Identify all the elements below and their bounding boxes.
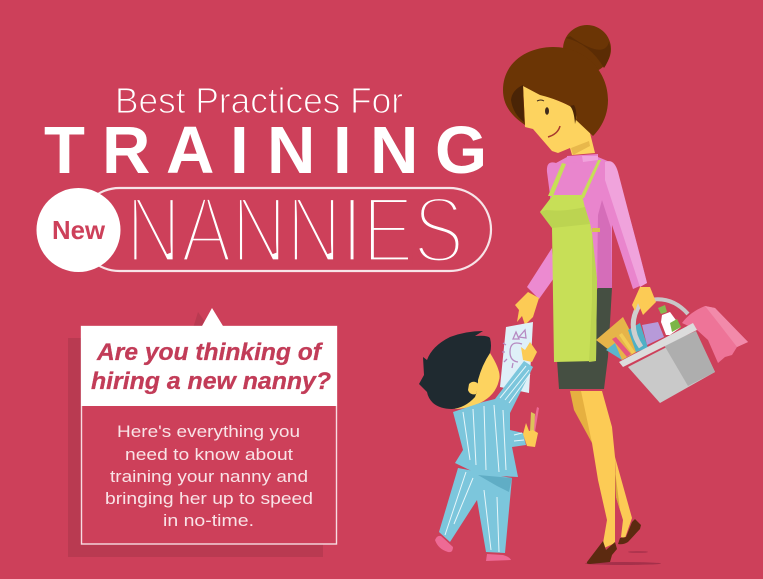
- child hands and pencils: [521, 342, 539, 447]
- nanny hands: [515, 292, 539, 325]
- pajama pants: [439, 468, 512, 553]
- book and pencils: [596, 317, 640, 360]
- callout description: in no-time.: [163, 512, 254, 530]
- illustration: child: [419, 322, 539, 561]
- ground shadows: [585, 551, 661, 565]
- skirt: [557, 288, 612, 389]
- pajama shirt: [453, 361, 533, 477]
- sweater: [527, 154, 647, 299]
- nanny hand on handle: [632, 287, 656, 315]
- badge: new: New: [52, 215, 106, 245]
- callout: [68, 308, 337, 557]
- drawing paper: [500, 322, 533, 393]
- heading: best practices for: Best Practices For: [115, 80, 403, 121]
- heading: training: TRAINING: [44, 113, 487, 188]
- bottle: [658, 305, 667, 314]
- heading: nannies: NANNIES: [126, 177, 464, 282]
- illustration: nanny: [503, 25, 748, 565]
- callout shadow: [68, 312, 323, 557]
- callout question: hiring a new nanny?: [91, 368, 331, 395]
- child head: [419, 331, 500, 409]
- callout question: Are you thinking of: [96, 339, 323, 366]
- basket body: [628, 332, 715, 403]
- basket: [596, 287, 748, 403]
- basket back handle: [650, 299, 688, 314]
- shoes: [587, 519, 641, 564]
- callout body: [82, 326, 336, 544]
- badge: new: [36, 188, 120, 272]
- pill outline: [78, 188, 491, 271]
- callout description: training your nanny and: [110, 468, 308, 486]
- title: [36, 80, 491, 282]
- apron: [540, 160, 601, 362]
- basket front handle: [633, 304, 641, 347]
- callout header: [81, 308, 337, 406]
- callout description: bringing her up to speed: [105, 490, 313, 508]
- hair bun: [563, 25, 611, 73]
- callout description: need to know about: [125, 446, 293, 464]
- head: [503, 47, 608, 155]
- legs: [570, 391, 632, 549]
- cloth: [682, 306, 748, 363]
- callout question: [91, 339, 331, 395]
- callout description: Here's everything you: [117, 423, 300, 441]
- sun doodle: [502, 330, 526, 368]
- callout description: [105, 423, 313, 530]
- child slippers: [435, 536, 511, 561]
